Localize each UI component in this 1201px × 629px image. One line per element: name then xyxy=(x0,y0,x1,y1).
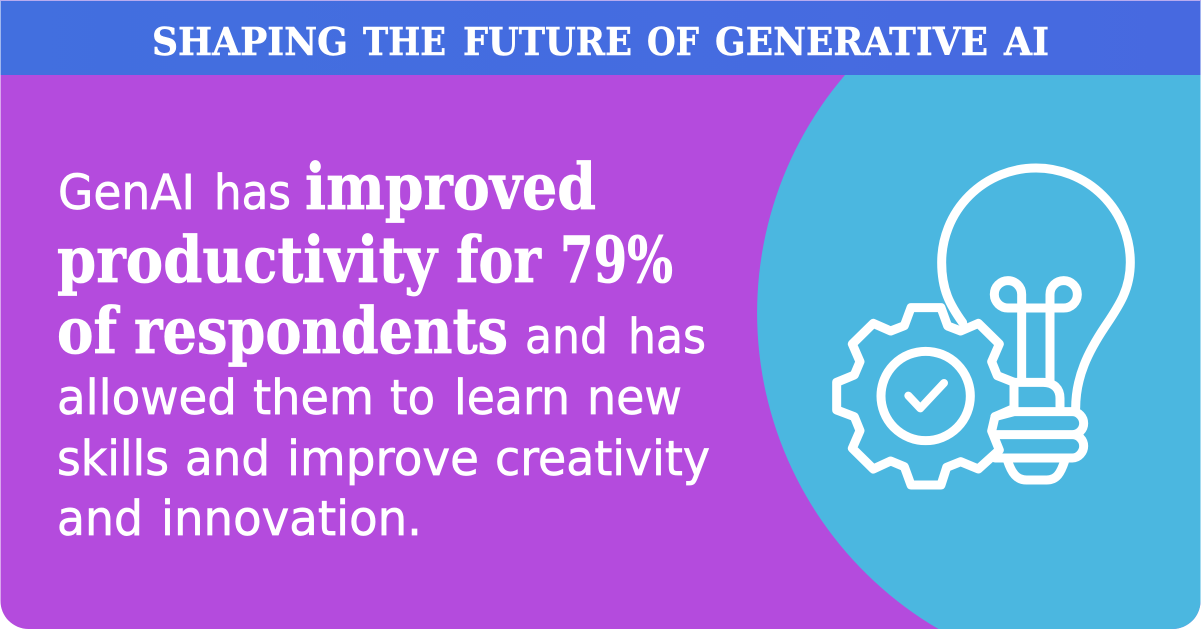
icon: bulb glass xyxy=(942,168,1130,408)
text block: main statement: and xyxy=(185,431,270,487)
text block: main statement: respondents xyxy=(134,294,508,369)
text block: main statement: innovation. xyxy=(161,491,422,547)
icon: light bulb with gear xyxy=(837,168,1130,485)
icon: gear ring xyxy=(881,351,970,441)
icon: bulb neck xyxy=(1014,382,1060,408)
text block: main statement: skills xyxy=(57,431,169,487)
text block: main statement: has xyxy=(628,309,706,365)
title: THE xyxy=(363,20,446,65)
icon: filament xyxy=(994,281,1077,382)
text block: main statement: them xyxy=(253,370,374,426)
title: AI xyxy=(1003,20,1049,65)
text block: main statement: creativity xyxy=(495,431,710,487)
text block: main statement: and xyxy=(57,491,143,547)
header banner xyxy=(0,0,1201,75)
icon: check mark xyxy=(908,383,944,408)
text block: main statement: 79% xyxy=(560,223,673,298)
panel: blue circle xyxy=(757,75,1200,629)
text block: main statement: GenAI xyxy=(58,165,195,221)
icon: bulb tip xyxy=(1007,460,1065,480)
text block: main statement: improved xyxy=(305,150,596,225)
text block: main statement: learn xyxy=(454,370,570,426)
title xyxy=(152,20,1049,65)
icon: gear xyxy=(837,308,1014,485)
text block: main statement: has xyxy=(214,165,291,221)
icon: bulb screw base xyxy=(995,412,1084,458)
title: FUTURE xyxy=(463,20,632,65)
title: GENERATIVE xyxy=(715,20,988,65)
title: OF xyxy=(647,20,699,65)
text block: main statement: of xyxy=(57,294,120,369)
text block: main statement: and xyxy=(525,309,608,365)
text block: main statement: improve xyxy=(287,431,479,487)
text block: main statement: productivity xyxy=(57,223,439,298)
title: SHAPING xyxy=(152,20,348,65)
text block: main statement xyxy=(57,150,710,547)
text block: main statement: to xyxy=(390,370,435,426)
text block: main statement: new xyxy=(587,370,682,426)
text block: main statement: allowed xyxy=(57,370,237,426)
text block: main statement: for xyxy=(456,223,542,298)
